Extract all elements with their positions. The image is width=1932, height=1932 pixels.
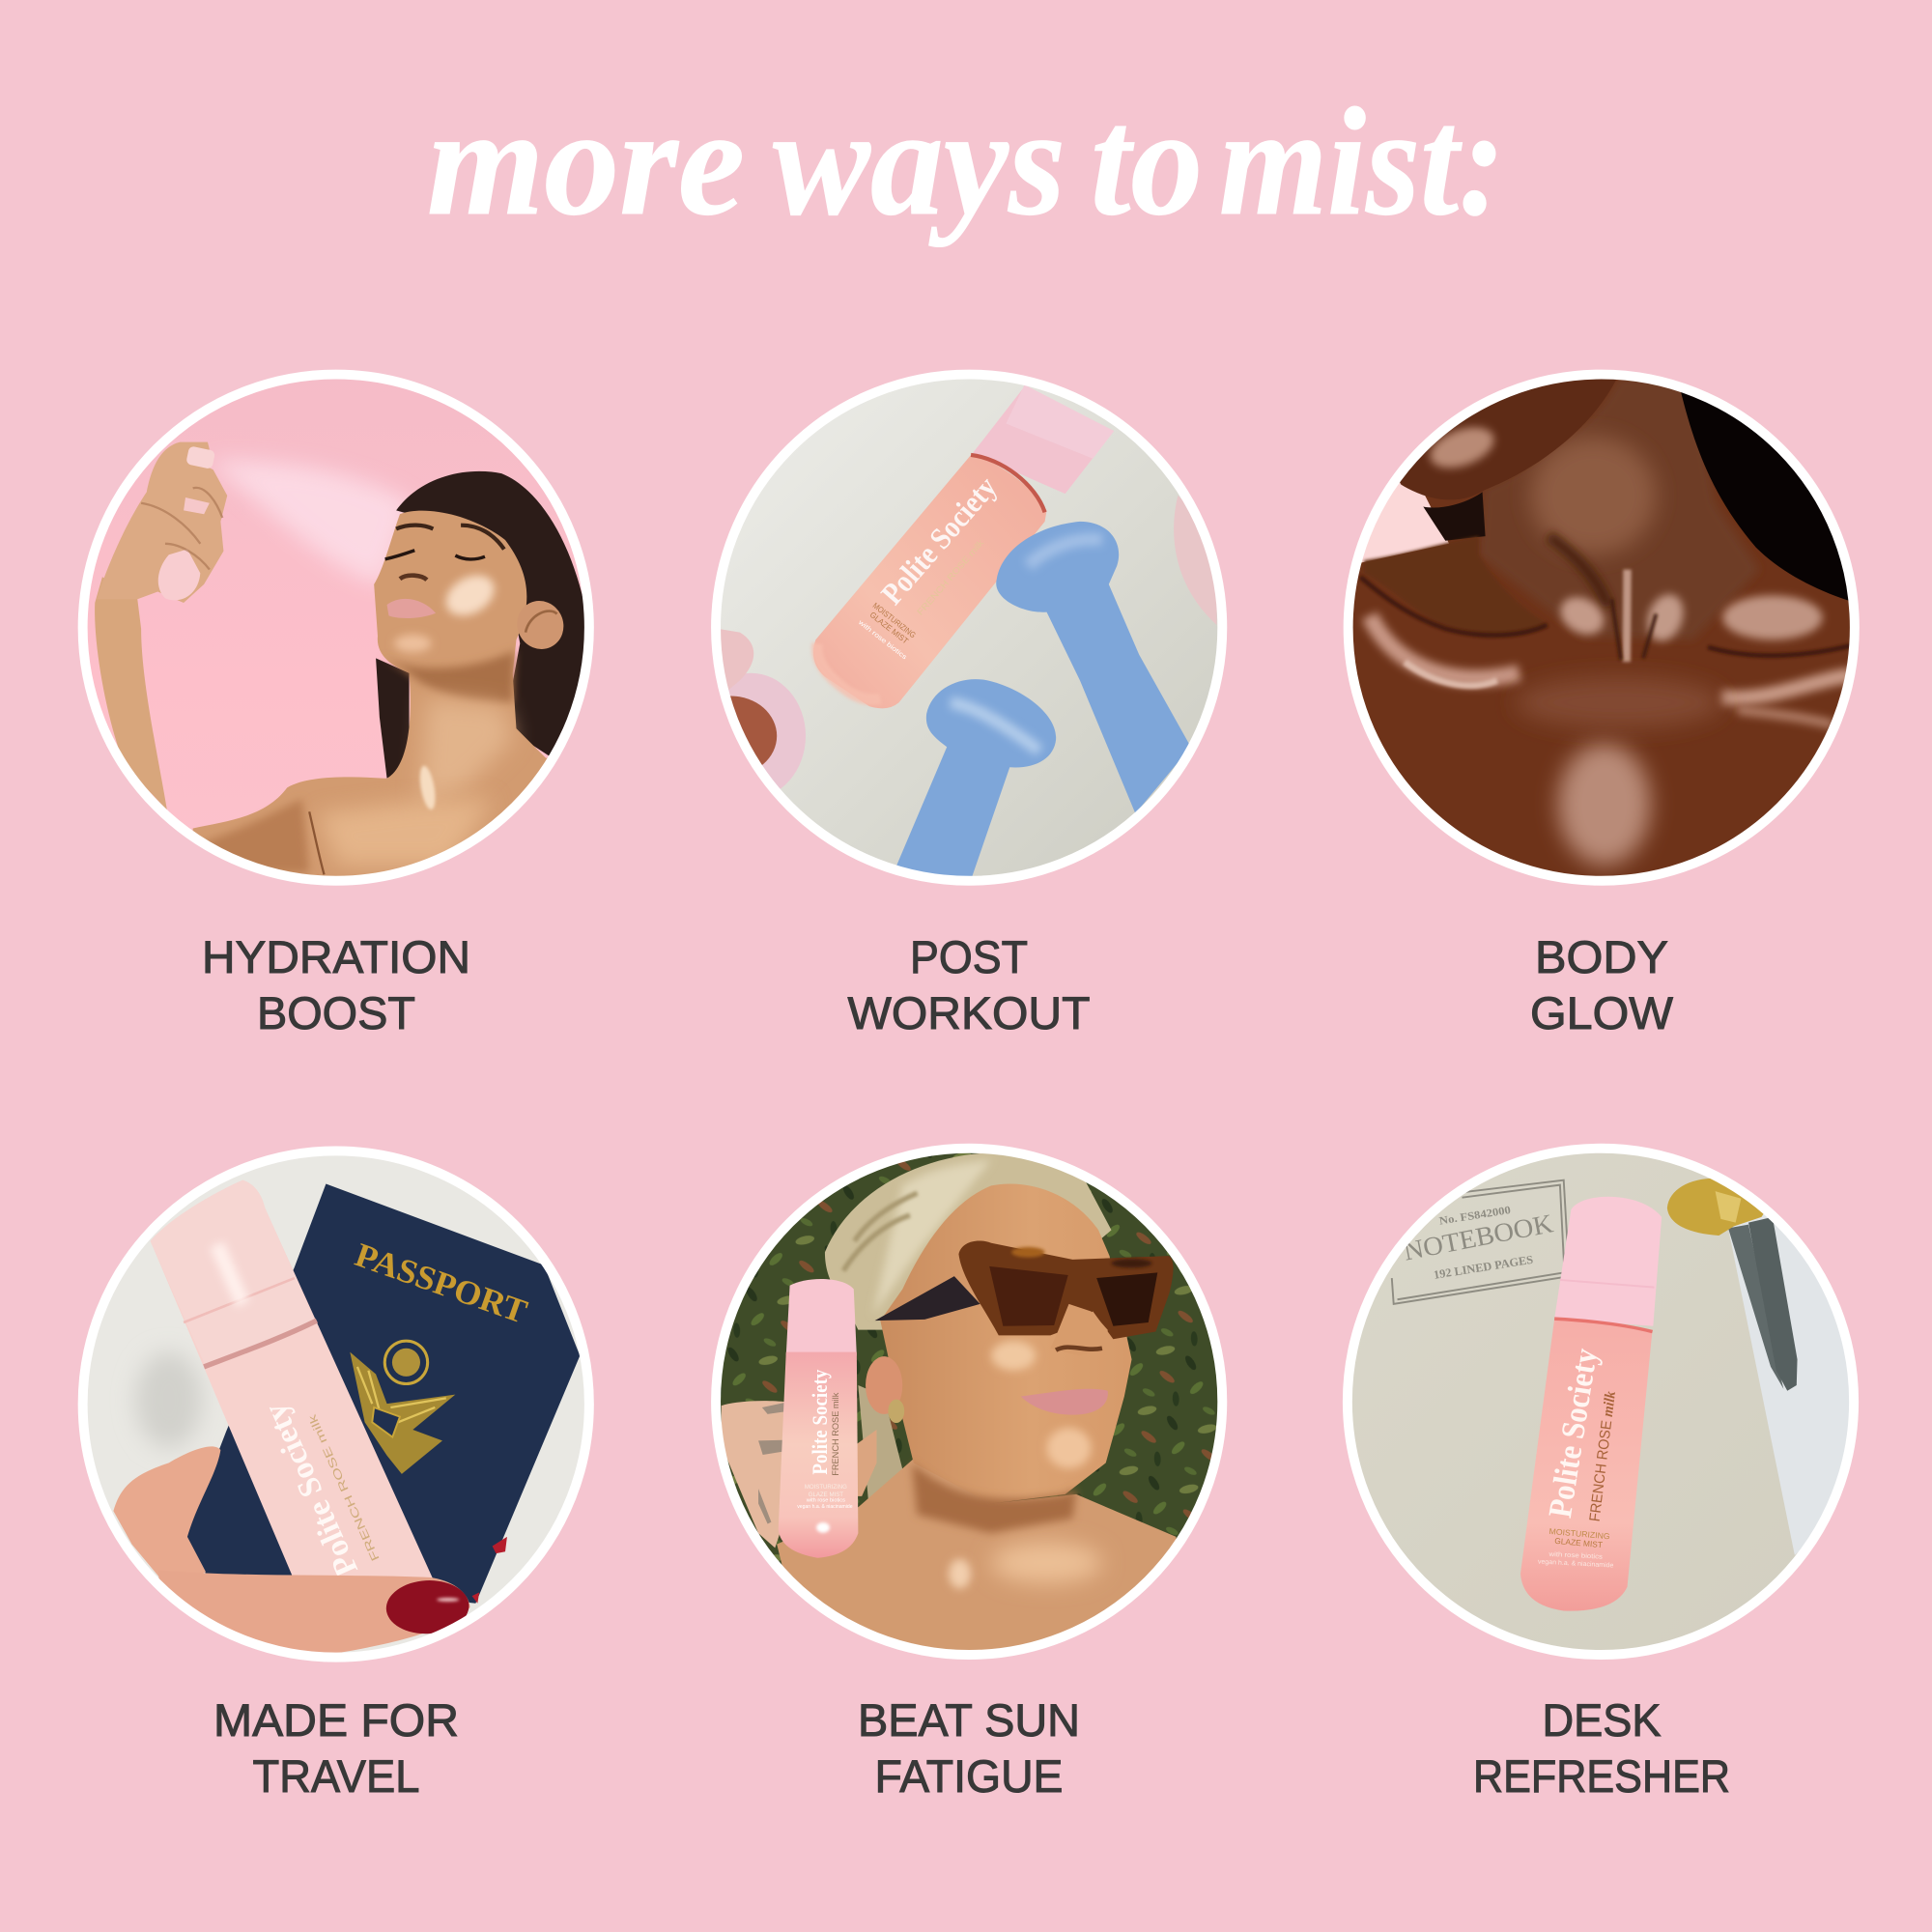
title: mist: bbox=[1219, 75, 1505, 247]
label: desk refresher: REFRESHER bbox=[1473, 1750, 1730, 1802]
label: body glow: GLOW bbox=[1530, 987, 1674, 1038]
label: desk refresher bbox=[1473, 1694, 1730, 1802]
photo: mist bottle on a notebook: vegan h.a. & niacinamide bbox=[1538, 1558, 1614, 1570]
label: hydration boost: BOOST bbox=[257, 987, 415, 1038]
photo: mist bottle held with passport: FRENCH ROSE milk bbox=[307, 1412, 383, 1563]
photo: mist bottle with blue dumbbells bbox=[685, 374, 1232, 884]
photo: woman in sunglasses holding mist: Polite Society bbox=[808, 1370, 832, 1475]
photo: woman in sunglasses holding mist: FRENCH ROSE milk bbox=[831, 1392, 840, 1476]
photo: mist bottle on a notebook: GLAZE MIST bbox=[1554, 1536, 1603, 1549]
panel: desk refresher bbox=[1342, 1149, 1860, 1802]
label: made for travel: TRAVEL bbox=[253, 1750, 419, 1802]
photo: mist bottle on a notebook: Polite Society bbox=[1542, 1346, 1605, 1520]
title: more bbox=[427, 75, 745, 247]
photo: woman in sunglasses holding mist bbox=[714, 1149, 1232, 1662]
label: body glow bbox=[1530, 931, 1674, 1038]
photo: woman in sunglasses holding mist: with rose biotics bbox=[806, 1498, 845, 1504]
title bbox=[427, 75, 1505, 247]
label: beat sun fatigue: FATIGUE bbox=[875, 1750, 1063, 1802]
photo: mist bottle on a notebook: MOISTURIZING bbox=[1548, 1526, 1610, 1541]
photo: mist bottle with blue dumbbells: Polite Society bbox=[874, 469, 1004, 611]
label: made for travel: MADE FOR bbox=[213, 1694, 459, 1746]
photo: woman misting her face bbox=[80, 374, 598, 884]
label: made for travel bbox=[213, 1694, 459, 1802]
photo: glowing neck and collarbones bbox=[1346, 374, 1863, 884]
label: hydration boost bbox=[202, 931, 470, 1038]
photo: mist bottle held with passport: Polite Society bbox=[257, 1398, 365, 1581]
photo: mist bottle on a notebook: with rose biotics bbox=[1548, 1551, 1604, 1561]
photo: mist bottle with blue dumbbells: GLAZE MIST bbox=[868, 610, 910, 645]
panel: hydration boost bbox=[80, 374, 598, 1038]
label: beat sun fatigue: BEAT SUN bbox=[858, 1694, 1080, 1746]
photo: mist bottle held with passport bbox=[80, 1149, 598, 1659]
panel: post workout bbox=[685, 374, 1232, 1038]
label: hydration boost: HYDRATION bbox=[202, 931, 470, 982]
photo: mist bottle with blue dumbbells: with rose biotics bbox=[856, 618, 908, 662]
title: ways bbox=[773, 75, 1065, 247]
label: post workout bbox=[848, 931, 1090, 1038]
photo: mist bottle with blue dumbbells: FRENCH ROSE milk bbox=[915, 538, 986, 617]
photo: woman in sunglasses holding mist: MOISTURIZING bbox=[805, 1484, 847, 1491]
panel: made for travel bbox=[80, 1149, 598, 1802]
label: desk refresher: DESK bbox=[1542, 1694, 1662, 1746]
photo: woman in sunglasses holding mist: vegan h.a. & niacinamide bbox=[797, 1504, 853, 1510]
photo: woman in sunglasses holding mist: GLAZE MIST bbox=[809, 1492, 843, 1498]
label: body glow: BODY bbox=[1535, 931, 1668, 982]
photo: mist bottle on a notebook bbox=[1342, 1149, 1860, 1659]
label: post workout: WORKOUT bbox=[848, 987, 1090, 1038]
photo: mist bottle on a notebook: NOTEBOOK bbox=[1401, 1208, 1555, 1266]
photo: mist bottle on a notebook: FRENCH ROSE milk bbox=[1587, 1390, 1619, 1522]
photo: mist bottle on a notebook: 192 LINED PAGES bbox=[1433, 1253, 1534, 1282]
photo: mist bottle with blue dumbbells: MOISTURIZING bbox=[871, 601, 918, 639]
title: to bbox=[1091, 75, 1203, 247]
panel: beat sun fatigue bbox=[714, 1149, 1232, 1802]
photo: mist bottle on a notebook: No. FS842000 bbox=[1438, 1205, 1512, 1228]
photo: mist bottle held with passport: PASSPORT bbox=[351, 1236, 532, 1331]
panel: body glow bbox=[1346, 374, 1863, 1038]
label: post workout: POST bbox=[910, 931, 1028, 982]
label: beat sun fatigue bbox=[858, 1694, 1080, 1802]
